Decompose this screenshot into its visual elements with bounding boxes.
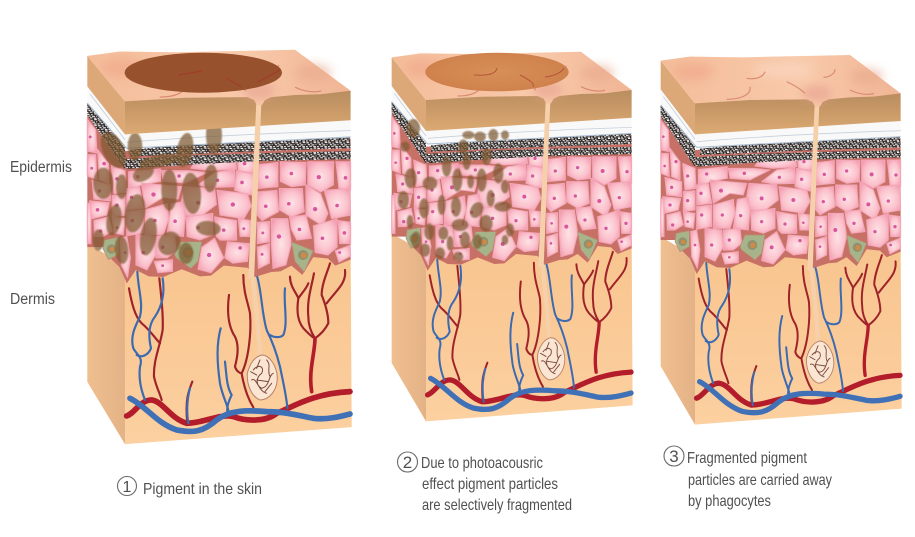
- caption 3: by phagocytes: [688, 493, 771, 510]
- epidermis surface stage 1: [87, 50, 351, 279]
- caption 3: [664, 446, 832, 510]
- caption 1: Pigment in the skin: [143, 481, 262, 498]
- caption 2: 2: [403, 453, 412, 472]
- pigment clusters stage 1: [93, 116, 222, 265]
- skin layers stage 3: [661, 89, 902, 425]
- caption 2: are selectively fragmented: [422, 497, 572, 514]
- panel: stage 3 skin block with pigment cleared: [661, 55, 902, 425]
- label: Epidermis: Epidermis: [10, 159, 72, 176]
- caption 1: [118, 476, 262, 498]
- caption 2: effect pigment particles: [422, 476, 558, 493]
- caption 3: Fragmented pigment: [687, 450, 807, 467]
- panel: stage 2 skin block with fragmented pigment: [392, 52, 633, 421]
- label: Dermis: Dermis: [10, 291, 55, 308]
- caption 2: Due to photoacousric: [421, 455, 543, 472]
- panel: stage 1 skin block with pigment: [87, 50, 352, 444]
- fragmented pigment particles stage 2: [398, 119, 514, 262]
- caption 3: 3: [669, 447, 679, 466]
- pigment spot on surface stage 1: [125, 53, 282, 93]
- caption 1: 1: [123, 479, 132, 496]
- skin layers stage 1: [87, 86, 352, 444]
- caption 2: [398, 452, 572, 514]
- caption 3: particles are carried away: [688, 472, 832, 489]
- skin layers stage 2: [392, 86, 633, 421]
- faded pigment spot on surface stage 2: [425, 53, 569, 91]
- epidermis surface stage 3: [661, 55, 901, 270]
- epidermis surface stage 2: [392, 52, 632, 267]
